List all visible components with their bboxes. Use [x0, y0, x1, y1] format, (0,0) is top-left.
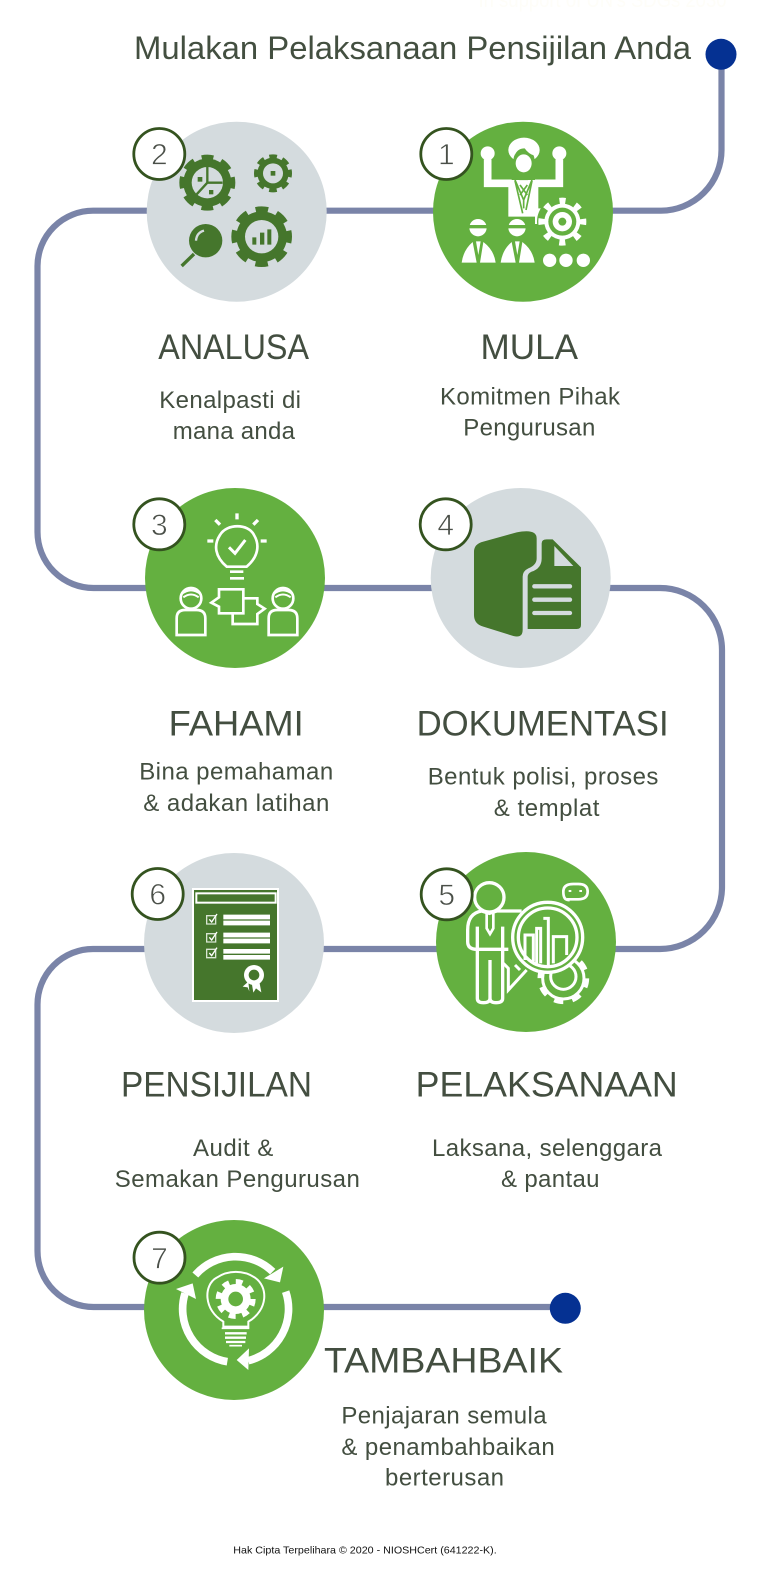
description — [139, 758, 333, 817]
description: Bentuk polisi, proses — [428, 763, 658, 790]
badge 7 — [134, 1232, 185, 1283]
heading: TAMBAHBAIK — [324, 1342, 563, 1381]
footer copyright: Hak Cipta Terpelihara © 2020 - NIOSHCert (641222-K). — [233, 1544, 497, 1556]
step 7: TAMBAHBAIK — [134, 1220, 563, 1491]
badge 1 — [421, 128, 472, 180]
step 3: FAHAMI — [134, 488, 333, 817]
heading: FAHAMI — [169, 704, 304, 744]
heading: PENSIJILAN — [121, 1066, 312, 1105]
step 2: ANALUSA — [134, 122, 327, 445]
icon: leader and team — [462, 138, 590, 267]
description — [341, 1402, 555, 1491]
connecting timeline path — [37, 54, 722, 1307]
start dot — [706, 39, 736, 70]
description: & penambahbaikan — [341, 1434, 555, 1461]
end dot — [550, 1293, 581, 1324]
icon: presenter with magnifier — [468, 883, 588, 1003]
badge 1: 1 — [438, 138, 455, 172]
heading: DOKUMENTASI — [417, 704, 669, 744]
badge 6: 6 — [149, 878, 166, 912]
description: & adakan latihan — [143, 790, 329, 817]
description — [440, 383, 621, 442]
icon: continuous improvement bulb — [176, 1257, 289, 1370]
step 6: PENSIJILAN — [115, 853, 360, 1193]
description — [432, 1135, 663, 1193]
description: & templat — [494, 795, 600, 822]
badge 2 — [134, 128, 185, 180]
description: berterusan — [385, 1464, 504, 1491]
badge 2: 2 — [151, 138, 168, 172]
description: & pantau — [501, 1166, 600, 1193]
title: Mulakan Pelaksanaan Pensijilan Anda — [134, 30, 692, 66]
icon: certificate — [193, 889, 278, 1001]
description — [428, 763, 658, 822]
step 5: PELAKSANAAN — [416, 852, 678, 1193]
badge 3 — [134, 499, 185, 550]
description: Laksana, selenggara — [432, 1135, 663, 1162]
description — [159, 387, 301, 445]
description: Bina pemahaman — [139, 758, 333, 785]
step 4: DOKUMENTASI — [417, 488, 669, 822]
icon: documents — [474, 531, 581, 637]
icon: idea and discussion — [177, 513, 297, 635]
badge 4: 4 — [437, 509, 454, 542]
badge 5: 5 — [438, 879, 455, 912]
badge 4 — [420, 499, 471, 550]
description: mana anda — [173, 418, 296, 445]
description: Audit & — [193, 1135, 273, 1162]
icon: gears and magnifier — [182, 156, 290, 266]
heading: MULA — [480, 328, 579, 367]
description — [115, 1135, 360, 1193]
badge 3: 3 — [151, 509, 168, 542]
description: Pengurusan — [463, 414, 595, 442]
step 1: MULA — [421, 122, 621, 441]
heading: ANALUSA — [158, 328, 310, 367]
description: Penjajaran semula — [341, 1402, 547, 1429]
description: Semakan Pengurusan — [115, 1166, 360, 1193]
heading: PELAKSANAAN — [416, 1066, 678, 1105]
description: Komitmen Pihak — [440, 383, 621, 410]
badge 6 — [132, 868, 183, 920]
badge 7: 7 — [151, 1242, 168, 1276]
description: Kenalpasti di — [159, 387, 301, 414]
badge 5 — [421, 869, 472, 920]
